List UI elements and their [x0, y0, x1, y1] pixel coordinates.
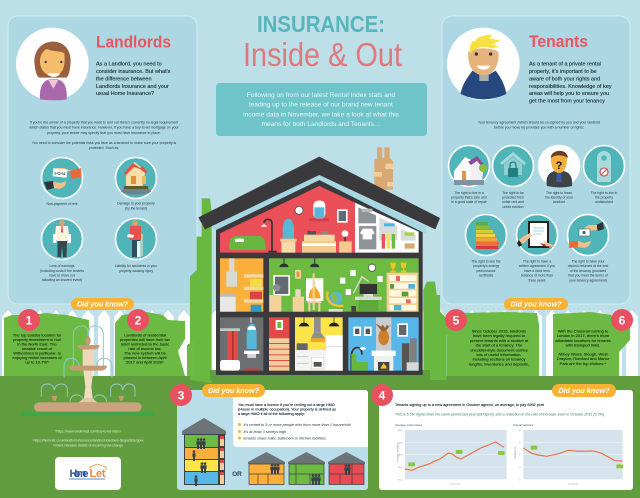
- wardrobe: [355, 203, 419, 253]
- pill: did you know 3: [202, 384, 265, 397]
- line chart: average rental values: Year/month: [450, 482, 460, 485]
- line chart: average rental values: £900: [398, 442, 403, 444]
- text: fact 1: enjoying rental increases of: [12, 355, 63, 360]
- caption: safe house: property that's safe and: [451, 196, 487, 200]
- line chart: annual variance: 2: [519, 479, 520, 481]
- text: fact 2: The new system will be: [124, 350, 167, 356]
- attic red room: [220, 186, 355, 253]
- pill: did you know 3: Did you know?: [208, 386, 260, 395]
- text: fact 5: checklist-style document carries: [470, 347, 528, 352]
- text: fact 5: the start of a tenancy. The: [476, 343, 523, 348]
- text: fact 1: in the North East. The: [17, 342, 57, 346]
- logo: HomeLet: Let: [90, 468, 106, 480]
- pill: did you know 4: Did you know?: [558, 386, 610, 395]
- text: fact 1: up to 10.7%*: [25, 360, 49, 364]
- caption: protected: The right to be: [502, 191, 524, 195]
- body text: tenants: before you move in) provides you with a number of rights:: [494, 126, 584, 130]
- icon: damage to your property: [116, 158, 156, 198]
- logo: HomeLet: Home: [70, 468, 88, 480]
- pill: did you know 4: [552, 384, 616, 397]
- green study: [269, 258, 419, 312]
- text: fact 2: rate of income tax.: [128, 346, 162, 351]
- body text: tenants: Your tenancy agreement (which should be co-signed by you and your landlord: [478, 120, 600, 124]
- text: fact 5: including sections on tenancy: [473, 357, 526, 362]
- line chart: annual variance: 8: [519, 442, 521, 444]
- stairs: [269, 317, 289, 371]
- caption: energy: performance: [476, 269, 496, 273]
- caption: deposit: of the tenancy (provided: [570, 269, 606, 273]
- text box: licence: [233, 390, 368, 447]
- badge 5: 5: [453, 314, 460, 328]
- caption: energy: certificate: [479, 274, 493, 278]
- text: fact 6: London in 2017, there's more: [557, 333, 610, 338]
- intro box: [216, 83, 427, 136]
- panel: did you know fact 1 and 2: [4, 309, 195, 376]
- caption: deposit: deposit returned at the end: [568, 264, 608, 268]
- hedges beside house: [190, 198, 447, 383]
- line chart: average rental values: £850: [398, 455, 403, 457]
- caption: non-payment of rent: Non-payment of rent: [47, 202, 78, 206]
- icon: do not disturb: [584, 146, 624, 186]
- panel: landlords: [8, 16, 197, 304]
- text box: licence: tenants share toilet, bathroom or kitchen facilities: [244, 436, 326, 440]
- kitchen: [295, 317, 343, 371]
- text: fact 1: seaside resort of: [22, 346, 53, 351]
- pill: did you know right: Did you know?: [510, 300, 562, 309]
- body text: landlords: You need to consider the potential risks you face as a landlord to make sure your property is: [32, 141, 176, 145]
- caption: safe house: in a good state of repair: [451, 200, 488, 204]
- badge 3: 3: [178, 388, 185, 402]
- intro box: means for both Landlords and Tenants…: [261, 121, 381, 128]
- text: fact 6: With the Crossrail coming to: [558, 328, 609, 334]
- panel 4: rents: [371, 384, 633, 490]
- icon: liability for accidents: [116, 218, 156, 260]
- footnotes: *https://www.landinvest.com/buy-to-let-index/: [55, 430, 121, 434]
- text: fact 1: The top coastal location for: [13, 332, 62, 338]
- line chart: average rental values: Average rental values: [395, 423, 423, 427]
- bathroom: [220, 317, 263, 371]
- text box: licence: (House in multiple occupation). Your property is defined as: [238, 408, 336, 412]
- icon: protected house lock: [492, 146, 534, 186]
- footnotes: rnment-releases-details-of-incoming-tax-change: [53, 444, 123, 448]
- line chart: annual variance: 10: [518, 430, 521, 432]
- fountain: [22, 326, 154, 416]
- caption: loss of earnings: Loss of earnings: [50, 264, 75, 268]
- caption: identity: The right to know: [546, 191, 573, 195]
- chimney: [373, 147, 394, 190]
- label: or: OR: [232, 471, 242, 478]
- heading: tenants: Tenants: [529, 32, 588, 51]
- text: fact 6: Park are the top choices.^: [560, 361, 606, 366]
- pill: did you know left: Did you know?: [77, 300, 129, 309]
- icon: red house: [328, 452, 365, 484]
- text: fact 5: lengths, inventories and deposits.: [469, 361, 529, 366]
- line chart: annual variance: Year/month: [568, 482, 578, 485]
- pill: did you know right: [504, 298, 568, 310]
- intro text: tenants: areas will help you to ensure you: [529, 91, 609, 97]
- hedge: fact 2: [115, 312, 185, 376]
- badge 3: [170, 384, 192, 406]
- icon: non-payment of rent: I-O-U: [54, 171, 66, 176]
- title: [243, 11, 402, 73]
- line chart: average rental values: £750: [398, 479, 403, 481]
- pill: did you know left: [71, 298, 134, 310]
- caption: written agreement: The right to have a: [523, 260, 551, 264]
- footnotes: ^https://homelet.co.uk/landlord-insurance/landlord-lowdown-blog/article/gove: [32, 438, 144, 442]
- body text: landlords: property, your lender may specify that you must have insurance in place.: [47, 131, 161, 135]
- intro text: tenants: property, it's important to be: [529, 69, 597, 75]
- caption: loss of earnings: have to move out: [49, 274, 75, 278]
- text: fact 2: properties will have their tax: [120, 337, 170, 342]
- line chart: annual variance: 4: [519, 467, 521, 469]
- text: fact 1: property investment is Hull: [13, 337, 61, 342]
- badge 4: [371, 384, 393, 406]
- body text: landlords: protected. Such as:: [89, 146, 119, 150]
- badge 1: [18, 309, 40, 331]
- living room: [348, 317, 419, 371]
- text: fact 2: Landlords of residential: [124, 332, 166, 338]
- caption: energy: The right to see the: [471, 260, 501, 264]
- text: fact 5: lots of useful information,: [476, 352, 522, 357]
- caption: liability: property causing injury: [119, 269, 153, 273]
- badge 5: [445, 309, 467, 331]
- caption: loss of earnings: (Including costs if the tenants: [40, 269, 84, 273]
- icon: orange house: [248, 452, 285, 484]
- text: rent detail: This is 5.5% higher than the same period last year (£873pcm) and a reduction in the rate of increase seen in October 2015 (6.3%): [395, 412, 604, 416]
- intro text: landlords: As a Landlord, you need to: [96, 62, 162, 68]
- caption: damage to property: Damage to your property: [117, 202, 155, 206]
- badge 2: 2: [135, 314, 142, 328]
- text: fact 6: Drayton, Romford and Manor: [557, 356, 610, 361]
- intro box: Following on from our latest Rental Index stats and: [247, 92, 396, 99]
- caption: identity: the identity of your: [545, 196, 574, 200]
- sky gap under roof: [210, 175, 426, 234]
- caption: written agreement: have a fixed term: [524, 269, 550, 273]
- chart icon: large HMO building: [182, 418, 226, 486]
- title: INSURANCE:: [257, 11, 385, 37]
- icon: landlord portrait: [16, 28, 89, 100]
- panel 3: HMO licence: [170, 384, 368, 490]
- body text: landlords: If you're the owner of a property that you want to rent out there's currently no legal requirement: [30, 120, 178, 124]
- hedge: fact 5: [444, 312, 539, 376]
- caption: undisturbed: undisturbed: [595, 200, 613, 204]
- badge 1: 1: [26, 314, 33, 328]
- caption: written agreement: three years: [529, 278, 546, 282]
- caption: protected: unfair rent and: [502, 200, 524, 204]
- text: fact 6: Abbey Wood, Slough, West: [558, 352, 609, 356]
- roof: [198, 157, 440, 229]
- intro text: tenants: responsibilities. Knowledge of key: [529, 84, 612, 90]
- house illustration: [198, 147, 440, 375]
- intro text: landlords: usual Home Insurance?: [96, 91, 154, 97]
- caption: protected: protected from: [502, 196, 524, 200]
- icon: written agreement: [516, 214, 558, 256]
- logo: HomeLet: [55, 457, 121, 490]
- line chart: annual variance: 6: [519, 455, 521, 457]
- hedge: fact 1: [4, 313, 89, 376]
- line chart: average rental values: £800: [398, 467, 403, 469]
- text: fact 2: 2017 and April 2020^: [126, 360, 164, 364]
- caption: damage to property: (by the tenant): [125, 206, 147, 210]
- icon: safe house: [448, 146, 490, 186]
- caption: undisturbed: the property: [595, 196, 613, 200]
- orange utility room: [220, 258, 263, 312]
- text box: licence: It's rented to 5 or more people who form more than 1 household: [244, 423, 351, 427]
- caption: written agreement: tenancy of more than: [521, 274, 553, 278]
- heading: landlords: Landlords: [96, 32, 171, 52]
- intro box: leading up to the release of our brand new tenant: [249, 102, 393, 109]
- icon: green house: [288, 452, 325, 485]
- icon: landlord identity: [538, 146, 580, 188]
- badge 2: [127, 309, 149, 331]
- line chart: annual variance: [513, 423, 623, 485]
- intro text: tenants: get the most from your tenancy: [529, 99, 605, 105]
- picket fence: [0, 310, 640, 376]
- caption: written agreement: written agreement if you: [519, 264, 555, 268]
- text: fact 2: phased in between April: [124, 355, 167, 360]
- panel: did you know fact 5 and 6: [444, 309, 633, 376]
- text box: licence: a large HMO if all of the following apply:: [238, 412, 305, 416]
- text: fact 6: with transport links.: [566, 343, 600, 348]
- intro text: landlords: consider insurance. But what's: [96, 69, 171, 75]
- caption: deposit: your tenancy agreement): [569, 278, 607, 282]
- text: fact 6: affordable locations for tenants: [555, 338, 611, 343]
- line chart: annual variance: Variance %: [514, 447, 517, 459]
- text: fact 5: Since October 2015, landlords: [472, 328, 526, 334]
- badge 6: 6: [619, 314, 626, 328]
- line chart: average rental values: £950: [398, 430, 403, 432]
- icon: landlord identity: ?: [556, 160, 563, 172]
- text: fact 2: relief restricted to the basic: [121, 342, 169, 346]
- caption: deposit: The right to have your: [572, 260, 605, 264]
- lawn: [0, 376, 640, 498]
- badge 4: 4: [379, 388, 386, 402]
- caption: protected: unfair eviction: [503, 205, 524, 209]
- text: fact 5: have been legally required to: [473, 333, 526, 338]
- icon: loss of earnings: [42, 218, 82, 260]
- icon: non-payment of rent: [42, 158, 82, 198]
- intro text: tenants: As a tenant of a private rental: [529, 62, 601, 68]
- caption: energy: property's energy: [473, 264, 499, 268]
- text: fact 5: present tenants with a booklet at: [470, 338, 529, 343]
- house wall frame: [216, 180, 423, 375]
- text box: licence: It's at least 3 storeys high: [244, 430, 286, 434]
- line chart: annual variance: Annual variance: [513, 423, 534, 427]
- caption: deposit: that you meet the terms of: [568, 274, 608, 278]
- intro box: income data in November, we take a look at what this: [243, 111, 400, 118]
- caption: identity: landlord: [553, 200, 565, 204]
- intro text: tenants: aware of both your rights and: [529, 76, 600, 82]
- subtitle: Inside & Out: [243, 36, 402, 73]
- hedge: fact 6: [553, 312, 630, 376]
- line chart: average rental values: [395, 423, 507, 485]
- text: rent headline: Tenants signing up to a new agreement in October agreed, on average, to pay £902 pcm: [395, 403, 544, 407]
- intro text: landlords: Landlords Insurance and your: [96, 84, 169, 90]
- icon: energy certificate: [466, 214, 506, 256]
- caption: loss of earnings: following an insured event): [42, 278, 82, 282]
- caption: safe house: The right to live in a: [454, 191, 484, 195]
- icon: deposit returned: [568, 214, 608, 256]
- badge 6: [611, 309, 633, 331]
- text box: licence: You must have a licence if you're renting out a large HMO: [238, 403, 335, 407]
- intro text: landlords: the difference between: [96, 76, 152, 82]
- panel: tenants: [442, 16, 630, 304]
- icon: tenant portrait: [447, 28, 520, 100]
- caption: liability: Liability for accidents in your: [115, 264, 158, 268]
- line chart: average rental values: Average rent (pcm): [396, 443, 399, 463]
- text: fact 1: Withernsea in particular, is: [13, 350, 61, 356]
- body text: landlords: which states that you must have insurance. However, if you have a buy-to-let mortgage on your: [29, 126, 179, 130]
- caption: undisturbed: The right to live in: [591, 191, 617, 195]
